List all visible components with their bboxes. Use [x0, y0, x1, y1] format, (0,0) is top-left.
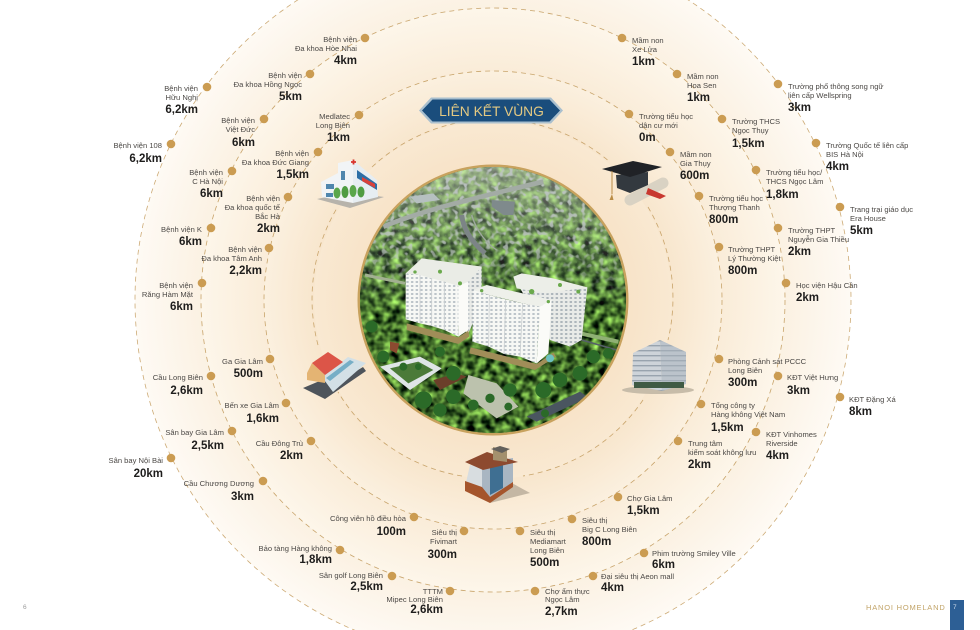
item: Trang trại giáo dục Era House: 5km: [850, 225, 873, 237]
item: TTTM Mipec Long Biên: [386, 587, 454, 616]
item: Bệnh viện Răng Hàm Mặt: 6km: [170, 301, 193, 313]
item: Phim trường Smiley Ville: [640, 549, 736, 571]
item: Tổng công ty Hàng không Việt Nam: 1,5km: [711, 422, 744, 434]
item: Trung tâm kiểm soát không lưu: [674, 437, 756, 471]
item: KĐT Đặng Xá: KĐT Đặng Xá: [849, 395, 896, 404]
item: Sân bay Gia Lâm: 2,5km: [191, 440, 224, 452]
item: Siêu thị Mediamart Long Biên: 500m: [530, 557, 559, 569]
item: Cầu Chương Dương: Cầu Chương Dương: [184, 479, 254, 488]
item: Trường Quốc tế liên cấp BIS Hà Nội: [812, 139, 908, 173]
item: Bệnh viện 108: Bệnh viện 108: [113, 141, 162, 150]
item: KĐT Đặng Xá: 8km: [849, 406, 872, 418]
item: Medlatec Long Biên: 1km: [327, 132, 350, 144]
item: KĐT Việt Hưng: [774, 372, 838, 397]
item: Ga Gia Lâm: Ga Gia Lâm: [222, 357, 263, 366]
item: Bệnh viện Đa khoa quốc tế Bắc Hà: Đa khoa quốc tế: [225, 203, 281, 212]
item: Bệnh viện C Hà Nội: 6km: [200, 188, 223, 200]
item: Sân bay Nội Bài: [109, 454, 175, 480]
item: Bệnh viện Đa khoa Đức Giang: Đa khoa Đức Giang: [242, 158, 309, 167]
item: Trường phổ thông song ngữ Wellspring: [774, 80, 884, 114]
item: Trường phổ thông song ngữ Wellspring: liên cấp Wellspring: [788, 91, 852, 100]
item: Bệnh viện Răng Hàm Mặt: Bệnh viện: [159, 281, 193, 290]
item: Trường THPT Lý Thường Kiệt: Lý Thường Kiệt: [728, 254, 781, 263]
item: Sân golf Long Biên: 2,5km: [350, 581, 383, 593]
item: Phòng Cảnh sát PCCC Long Biên: [715, 355, 807, 389]
item: Cầu Đông Trù: Cầu Đông Trù: [256, 439, 303, 448]
item: Chợ Gia Lâm: [614, 493, 672, 517]
item: Trường tiểu học dân cư mới: 0m: [639, 132, 656, 144]
group: transport: [109, 355, 315, 503]
item: Mầm non Hoa Sen: 1km: [687, 92, 710, 104]
item: Trường tiểu học Thượng Thanh: Trường tiểu học: [709, 194, 763, 203]
item: Bệnh viện Đa khoa quốc tế Bắc Hà: 2km: [257, 223, 280, 235]
item: Học viện Hậu Cần: 2km: [796, 292, 819, 304]
item: Công viên hồ điều hòa: Công viên hồ điều hòa: [330, 514, 407, 523]
banner: Liên kết vùng: LIÊN KẾT VÙNG: [439, 103, 544, 119]
item: Bảo tàng Hàng không: [259, 544, 344, 566]
item: Tổng công ty Hàng không Việt Nam: [697, 400, 785, 434]
icon: hospital: [317, 160, 384, 208]
item: Sân bay Nội Bài: Sân bay Nội Bài: [109, 456, 163, 465]
item: Bệnh viện Đa khoa Hồng Ngọc: 5km: [279, 91, 302, 103]
item: Trường tiểu học/THCS Ngọc Lâm: [752, 166, 823, 201]
item: Phòng Cảnh sát PCCC Long Biên: 300m: [728, 377, 757, 389]
item: Trường phổ thông song ngữ Wellspring: Trường phổ thông song ngữ: [788, 82, 884, 91]
item: Medlatec Long Biên: Medlatec: [319, 112, 350, 121]
item: Bệnh viện Đa khoa Hòe Nhai: Bệnh viện: [323, 35, 357, 44]
item: KĐT Vinhomes Riverside: 4km: [766, 450, 789, 462]
item: Bệnh viện Việt Đức: 6km: [232, 137, 255, 149]
item: Chợ ẩm thực Ngọc Lâm: 2,7km: [545, 606, 578, 618]
item: Chợ ẩm thực Ngọc Lâm: [531, 587, 590, 618]
item: Chợ Gia Lâm: Chợ Gia Lâm: [627, 494, 672, 503]
item: Bệnh viện Đa khoa Tâm Anh: Đa khoa Tâm Anh: [201, 254, 262, 263]
item: Medlatec Long Biên: [316, 111, 363, 144]
item: Trường tiểu học Thượng Thanh: [695, 192, 763, 226]
item: Trường THPT Nguyễn Gia Thiều: Nguyễn Gia Thiều: [788, 235, 849, 244]
icon: shop building: [465, 446, 530, 503]
item: Bệnh viện Đa khoa Hòe Nhai: [295, 34, 369, 67]
item: Bệnh viện Đa khoa quốc tế Bắc Hà: Bệnh viện: [246, 194, 280, 203]
item: Siêu thị Big C Long Biên: 800m: [582, 536, 611, 548]
item: Đại siêu thị Aeon mall: 4km: [601, 582, 624, 594]
item: Đại siêu thị Aeon mall: Đại siêu thị Aeon mall: [601, 572, 674, 581]
item: Bệnh viện Đa khoa Hồng Ngọc: Bệnh viện: [268, 71, 302, 80]
item: KĐT Đặng Xá: [836, 393, 896, 418]
item: Trường THCS Ngọc Thụy: Ngọc Thụy: [732, 126, 769, 135]
item: Trường tiểu học/THCS Ngọc Lâm: Trường tiểu học/: [766, 168, 823, 177]
item: Bệnh viện Hữu Nghị: [164, 83, 211, 116]
item: Siêu thị Fivimart: 300m: [428, 549, 457, 561]
item: Siêu thị Mediamart Long Biên: Siêu thị: [530, 528, 556, 537]
item: Sân bay Nội Bài: 20km: [134, 468, 163, 480]
item: Siêu thị Mediamart Long Biên: Long Biên: [530, 546, 564, 555]
item: Medlatec Long Biên: Long Biên: [316, 121, 350, 130]
item: Sân golf Long Biên: Sân golf Long Biên: [319, 571, 383, 580]
item: Bệnh viện Đa khoa quốc tế Bắc Hà: Bắc Hà: [255, 212, 281, 221]
item: Trường THPT Lý Thường Kiệt: 800m: [728, 265, 757, 277]
item: Trường tiểu học/THCS Ngọc Lâm: THCS Ngọc Lâm: [766, 177, 823, 186]
item: KĐT Việt Hưng: 3km: [787, 385, 810, 397]
item: Bệnh viện Đa khoa Đức Giang: 1,5km: [276, 169, 309, 181]
item: Bệnh viện Việt Đức: [221, 115, 268, 149]
item: Đại siêu thị Aeon mall: [589, 572, 674, 594]
item: Chợ ẩm thực Ngọc Lâm: Ngọc Lâm: [545, 595, 580, 604]
item: Bảo tàng Hàng không: Bảo tàng Hàng không: [259, 544, 332, 553]
item: Phim trường Smiley Ville: 6km: [652, 559, 675, 571]
item: Mầm non Hoa Sen: Mầm non: [687, 72, 719, 81]
item: Trường THPT Nguyễn Gia Thiều: 2km: [788, 246, 811, 258]
icon: graduation cap: [602, 161, 666, 200]
group: schools: [618, 34, 913, 304]
item: KĐT Việt Hưng: KĐT Việt Hưng: [787, 373, 838, 382]
icon: train station: [303, 352, 366, 399]
item: Trường tiểu học dân cư mới: Trường tiểu học: [639, 112, 693, 121]
item: Trường THCS Ngọc Thụy: 1,5km: [732, 138, 765, 150]
banner: Liên kết vùng: [419, 98, 563, 124]
item: Bệnh viện C Hà Nội: [189, 167, 236, 200]
footer brand: HANOI HOMELAND: [866, 603, 946, 612]
item: Ga Gia Lâm: [222, 355, 274, 380]
item: Trung tâm kiểm soát không lưu: kiểm soát không lưu: [688, 448, 756, 457]
item: Bệnh viện K: 6km: [179, 236, 202, 248]
item: Siêu thị Mediamart Long Biên: Mediamart: [530, 537, 567, 546]
item: Trang trại giáo dục Era House: Era House: [850, 214, 886, 223]
item: Mầm non Xe Lửa: [618, 34, 664, 68]
item: Phòng Cảnh sát PCCC Long Biên: Phòng Cảnh sát PCCC: [728, 357, 807, 366]
item: Cầu Chương Dương: 3km: [231, 491, 254, 503]
item: TTTM Mipec Long Biên: TTTM: [423, 587, 443, 596]
item: Chợ ẩm thực Ngọc Lâm: Chợ ẩm thực: [545, 587, 590, 596]
item: Trang trại giáo dục Era House: [836, 203, 913, 237]
item: Công viên hồ điều hòa: 100m: [377, 526, 406, 538]
item: Công viên hồ điều hòa: [330, 513, 418, 538]
item: Bệnh viện Đa khoa Tâm Anh: 2,2km: [229, 265, 262, 277]
item: Siêu thị Fivimart: Fivimart: [430, 537, 458, 546]
item: Bệnh viện Đa khoa Hòe Nhai: 4km: [334, 55, 357, 67]
item: Trường Quốc tế liên cấp BIS Hà Nội: 4km: [826, 161, 849, 173]
item: Bệnh viện Đa khoa Tâm Anh: Bệnh viện: [228, 245, 262, 254]
item: Trường tiểu học Thượng Thanh: 800m: [709, 214, 738, 226]
item: Bệnh viện C Hà Nội: Bệnh viện: [189, 168, 223, 177]
item: Trường THPT Lý Thường Kiệt: [715, 243, 781, 277]
item: Bệnh viện C Hà Nội: C Hà Nội: [192, 177, 223, 186]
item: Bệnh viện Răng Hàm Mặt: Răng Hàm Mặt: [142, 290, 194, 299]
page number left: 6: [23, 604, 27, 611]
item: TTTM Mipec Long Biên: 2,6km: [410, 604, 443, 616]
item: Mầm non Gia Thụy: Gia Thụy: [680, 159, 711, 168]
item: Sân golf Long Biên: [319, 571, 396, 593]
item: Mầm non Xe Lửa: Xe Lửa: [632, 45, 658, 54]
item: Phòng Cảnh sát PCCC Long Biên: Long Biên: [728, 366, 762, 375]
item: Bệnh viện Răng Hàm Mặt: [142, 279, 206, 313]
item: Bệnh viện K: Bệnh viện K: [161, 225, 202, 234]
item: Mầm non Gia Thụy: 600m: [680, 170, 709, 182]
item: Bảo tàng Hàng không: 1,8km: [299, 554, 332, 566]
item: Mầm non Hoa Sen: [673, 70, 719, 104]
item: Trang trại giáo dục Era House: Trang trại giáo dục: [850, 205, 913, 214]
item: Trường Quốc tế liên cấp BIS Hà Nội: BIS Hà Nội: [826, 150, 864, 159]
item: Mầm non Hoa Sen: Hoa Sen: [687, 81, 717, 90]
item: Tổng công ty Hàng không Việt Nam: Hàng không Việt Nam: [711, 410, 785, 419]
item: Bệnh viện Đa khoa Đức Giang: [242, 148, 322, 181]
item: Bệnh viện Đa khoa Hòe Nhai: Đa khoa Hòe Nhai: [295, 44, 357, 53]
group: urban and services: [674, 355, 896, 471]
item: KĐT Vinhomes Riverside: KĐT Vinhomes: [766, 430, 817, 439]
item: Cầu Long Biên: [153, 372, 215, 397]
item: Siêu thị Big C Long Biên: [568, 515, 637, 548]
item: Cầu Chương Dương: [184, 477, 267, 503]
item: Trường Quốc tế liên cấp BIS Hà Nội: Trường Quốc tế liên cấp: [826, 141, 908, 150]
item: Phim trường Smiley Ville: Phim trường Smiley Ville: [652, 549, 736, 558]
item: Bệnh viện K: [161, 224, 215, 248]
item: Cầu Long Biên: Cầu Long Biên: [153, 373, 203, 382]
item: Tổng công ty Hàng không Việt Nam: Tổng công ty: [711, 401, 755, 410]
item: Trường tiểu học dân cư mới: [625, 110, 693, 144]
icon: office building: [622, 340, 694, 394]
item: Bệnh viện Việt Đức: Việt Đức: [226, 125, 255, 134]
item: Trung tâm kiểm soát không lưu: Trung tâm: [688, 439, 722, 448]
item: Mầm non Xe Lửa: 1km: [632, 56, 655, 68]
item: Trường tiểu học Thượng Thanh: Thượng Thanh: [709, 203, 760, 212]
item: Trường tiểu học/THCS Ngọc Lâm: 1,8km: [766, 189, 799, 201]
page number tab: 7: [953, 604, 957, 611]
item: Trường THPT Nguyễn Gia Thiều: [774, 224, 849, 258]
item: Bệnh viện Hữu Nghị: Bệnh viện: [164, 84, 198, 93]
item: Học viện Hậu Cần: Học viện Hậu Cần: [796, 281, 858, 290]
item: Bệnh viện Hữu Nghị: 6,2km: [165, 104, 198, 116]
item: Bệnh viện Đa khoa quốc tế Bắc Hà: [225, 193, 292, 235]
item: Sân bay Gia Lâm: Sân bay Gia Lâm: [165, 428, 224, 437]
item: Sân bay Gia Lâm: [165, 427, 236, 452]
item: Bến xe Gia Lâm: [225, 399, 290, 425]
item: TTTM Mipec Long Biên: Mipec Long Biên: [386, 595, 443, 604]
item: Bệnh viện 108: [113, 140, 175, 165]
item: Bệnh viện Đa khoa Hồng Ngọc: [234, 70, 314, 103]
item: Cầu Đông Trù: [256, 437, 315, 462]
item: Bến xe Gia Lâm: 1,6km: [246, 413, 279, 425]
item: Mầm non Gia Thụy: [666, 148, 712, 182]
item: Bến xe Gia Lâm: Bến xe Gia Lâm: [225, 401, 279, 410]
item: Trường THPT Lý Thường Kiệt: Trường THPT: [728, 245, 776, 254]
item: Siêu thị Fivimart: [428, 527, 468, 561]
central project photo: [350, 160, 640, 436]
page number tab: [950, 600, 964, 630]
item: Bệnh viện Đa khoa Tâm Anh: [201, 244, 273, 277]
item: Cầu Long Biên: 2,6km: [170, 385, 203, 397]
item: Bệnh viện Đa khoa Đức Giang: Bệnh viện: [275, 149, 309, 158]
item: Bệnh viện Đa khoa Hồng Ngọc: Đa khoa Hồng Ngọc: [234, 80, 302, 89]
item: Siêu thị Big C Long Biên: Siêu thị: [582, 516, 608, 525]
background rings: [135, 0, 851, 630]
item: Mầm non Gia Thụy: Mầm non: [680, 150, 712, 159]
item: Bệnh viện 108: 6,2km: [129, 153, 162, 165]
item: Trung tâm kiểm soát không lưu: 2km: [688, 459, 711, 471]
item: KĐT Vinhomes Riverside: Riverside: [766, 439, 798, 448]
item: Cầu Đông Trù: 2km: [280, 450, 303, 462]
item: Chợ Gia Lâm: 1,5km: [627, 505, 660, 517]
item: Bệnh viện Việt Đức: Bệnh viện: [221, 116, 255, 125]
item: Trường THCS Ngọc Thụy: Trường THCS: [732, 117, 780, 126]
item: Trường tiểu học dân cư mới: dân cư mới: [639, 121, 678, 130]
item: Siêu thị Big C Long Biên: Big C Long Biên: [582, 525, 637, 534]
item: Trường THCS Ngọc Thụy: [718, 115, 780, 150]
item: Ga Gia Lâm: 500m: [234, 368, 263, 380]
item: Bệnh viện Hữu Nghị: Hữu Nghị: [165, 93, 198, 102]
item: Trường THPT Nguyễn Gia Thiều: Trường THPT: [788, 226, 836, 235]
item: Siêu thị Fivimart: Siêu thị: [432, 528, 457, 537]
item: Trường phổ thông song ngữ Wellspring: 3km: [788, 102, 811, 114]
group: hospitals: [113, 34, 369, 313]
item: Mầm non Xe Lửa: Mầm non: [632, 36, 664, 45]
item: Siêu thị Mediamart Long Biên: [516, 527, 567, 569]
item: KĐT Vinhomes Riverside: [752, 428, 817, 462]
item: Học viện Hậu Cần: [782, 279, 858, 304]
group: leisure and shopping: [259, 493, 736, 618]
